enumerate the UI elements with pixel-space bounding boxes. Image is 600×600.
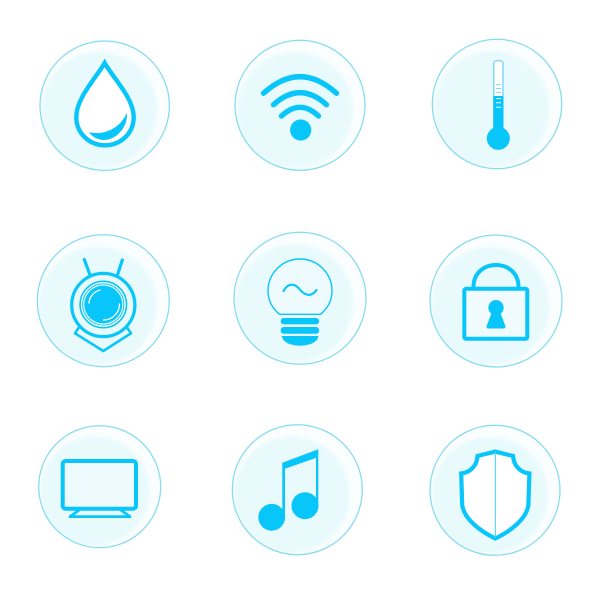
padlock body	[464, 289, 527, 339]
bubble: thermometer	[432, 39, 562, 169]
icon: camera badge	[37, 235, 169, 367]
tv stand	[70, 510, 130, 517]
bulb filament wave	[284, 285, 316, 295]
camera base	[75, 328, 131, 351]
wifi arcs	[264, 77, 336, 116]
camera antennas	[84, 260, 122, 275]
wifi dot	[290, 119, 311, 141]
tv screen	[63, 461, 136, 509]
music note heads	[258, 492, 318, 531]
icon: water drop badge	[40, 41, 169, 170]
bubble: water drop	[40, 41, 169, 170]
icon: shield badge	[430, 425, 560, 555]
water drop outline	[76, 63, 134, 145]
shield centre line	[494, 451, 496, 538]
icon: light bulb badge	[234, 232, 366, 364]
bubble: shield	[430, 425, 560, 555]
bulb glass	[268, 259, 332, 314]
bubble: television	[39, 426, 161, 548]
bubble: camera	[37, 235, 169, 367]
shield outline	[461, 452, 529, 538]
thermometer liquid	[487, 96, 510, 150]
bubble: music note	[232, 425, 362, 555]
bubble: wifi	[235, 40, 365, 170]
camera body	[72, 273, 135, 337]
icon: music note badge	[232, 425, 362, 555]
icon: wifi badge	[235, 40, 365, 170]
bubble: light bulb	[234, 232, 366, 364]
keyhole	[486, 300, 506, 328]
thermometer tube	[494, 61, 503, 131]
bubble: padlock	[430, 235, 562, 367]
icon: television badge	[39, 426, 161, 548]
icon: padlock badge	[430, 235, 562, 367]
bulb base	[281, 318, 319, 346]
music note stems and beam	[282, 449, 318, 517]
water drop crescent	[89, 113, 127, 140]
icon: thermometer badge	[432, 39, 562, 169]
padlock shackle	[474, 265, 518, 287]
thermometer ticks	[496, 84, 501, 107]
camera lens	[80, 281, 127, 328]
